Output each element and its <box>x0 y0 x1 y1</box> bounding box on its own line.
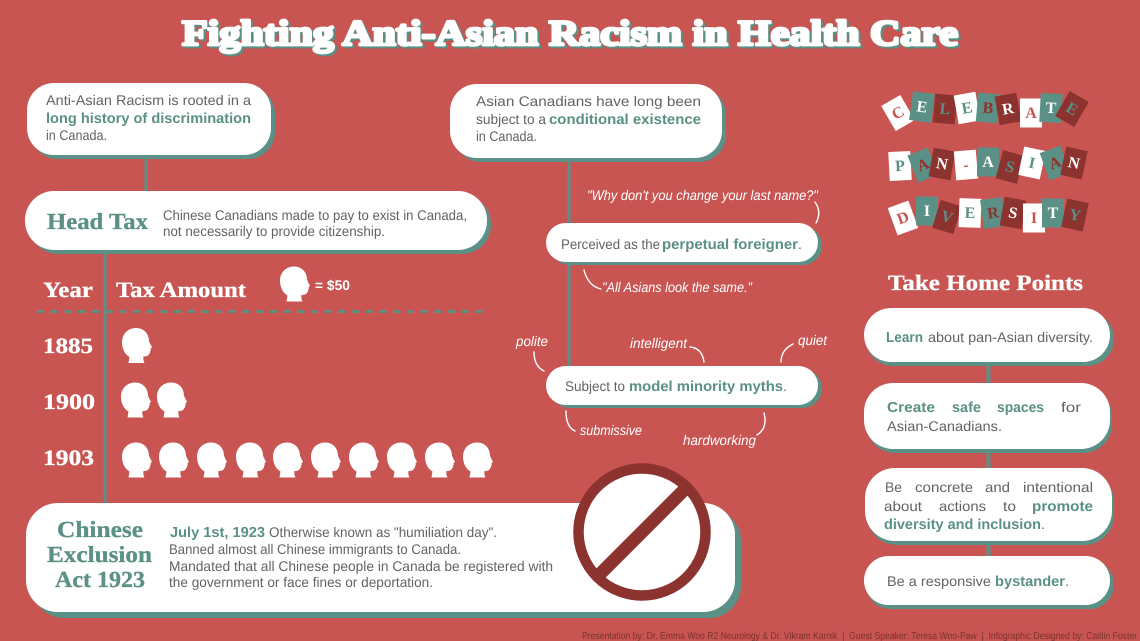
panel: Chinese Exclusion Act 1923: Mandated that all Chinese people in Canada be registered with <box>169 558 553 574</box>
point: create safe spaces: safe <box>952 400 981 416</box>
point: promote diversity and inclusion: about <box>884 498 922 514</box>
chart: head tax amounts by year <box>37 266 493 478</box>
callout: conditional existence: Asian Canadians have long been <box>476 93 701 109</box>
row: 1885 <box>43 328 152 363</box>
banner: pan-asian: A <box>982 154 994 171</box>
panel: Chinese Exclusion Act 1923: the government or face fines or deportation. <box>169 574 433 590</box>
panel: Chinese Exclusion Act 1923: Banned almost all Chinese immigrants to Canada. <box>169 541 461 557</box>
banner: celebrate: E <box>960 99 974 118</box>
panel: head tax: Chinese Canadians made to pay to exist in Canada, <box>163 207 467 223</box>
banner: diversity: Y <box>1067 206 1083 225</box>
point: create safe spaces: for <box>1061 399 1081 415</box>
point: create safe spaces: Create <box>887 400 935 416</box>
panel: head tax: not necessarily to provide citizenship. <box>163 223 385 239</box>
point: responsive bystander <box>864 556 1114 609</box>
panel: perpetual foreigner: perpetual foreigner <box>662 237 798 253</box>
panel: model minority myths <box>515 332 828 448</box>
point: responsive bystander: Be a responsive <box>887 573 991 589</box>
banner: celebrate: C <box>889 103 908 124</box>
point: promote diversity and inclusion: . <box>1041 516 1045 532</box>
point: responsive bystander: bystander <box>995 574 1065 590</box>
banner: diversity: V <box>939 208 955 227</box>
point: learn: about pan-Asian diversity. <box>928 329 1093 345</box>
callout: history of discrimination: long history of discrimination <box>46 111 251 127</box>
panel: model minority myths: . <box>783 378 787 394</box>
title: Fighting Anti-Asian Racism in Health Care <box>182 13 958 53</box>
callout: conditional existence: subject to a <box>476 111 546 127</box>
banner: pan-asian: P <box>895 158 906 175</box>
callout: conditional existence: in Canada. <box>476 128 537 144</box>
banner: pan-asian: N <box>1066 154 1082 173</box>
panel: model minority myths: submissive <box>580 422 642 438</box>
icon: prohibition sign <box>578 468 706 596</box>
row: 1900 <box>43 382 187 418</box>
panel: model minority myths: quiet <box>798 332 828 348</box>
heading: take home points: Take Home Points <box>888 270 1083 295</box>
point: promote diversity and inclusion: promote <box>1032 499 1093 515</box>
panel: perpetual foreigner: Perceived as the <box>561 236 660 252</box>
banner: celebrate: R <box>1001 100 1016 119</box>
banner: pan-asian: A <box>915 155 932 176</box>
banner: celebrate: E <box>915 98 928 117</box>
banner: diversity: T <box>1048 205 1059 222</box>
panel: Chinese Exclusion Act 1923: July 1st, 1923 <box>170 525 265 541</box>
callout: conditional existence: conditional existence <box>549 112 701 128</box>
panel: Chinese Exclusion Act 1923: Exclusion <box>47 542 152 567</box>
point: learn: Learn <box>886 330 923 346</box>
panel: model minority myths: hardworking <box>683 432 756 448</box>
point: create safe spaces: spaces <box>997 400 1044 416</box>
banner: diversity: I <box>924 203 930 220</box>
panel: perpetual foreigner <box>546 187 822 295</box>
point: responsive bystander: . <box>1065 573 1069 589</box>
point: promote diversity and inclusion: concrete <box>915 479 973 495</box>
column headings: Tax Amount <box>116 277 247 302</box>
panel: model minority myths: model minority myths <box>629 379 783 395</box>
panel: perpetual foreigner: "All Asians look the same." <box>602 279 753 295</box>
point: promote diversity and inclusion: and <box>985 479 1010 495</box>
point: create safe spaces <box>864 383 1112 453</box>
point: promote diversity and inclusion: actions <box>939 498 986 514</box>
row: 1885: 1885 <box>43 333 93 358</box>
callout: conditional existence <box>450 84 726 162</box>
banner: celebrate: E <box>1063 99 1081 119</box>
banner: diversity: S <box>1007 204 1019 223</box>
panel: model minority myths: polite <box>515 333 548 349</box>
legend: one head equals $50 <box>280 266 350 302</box>
banner: celebrate: B <box>982 100 994 117</box>
point: promote diversity and inclusion: to <box>1003 498 1016 514</box>
banner: celebrate: L <box>939 101 951 118</box>
callout: history of discrimination: Anti-Asian Racism is rooted in a <box>46 92 251 108</box>
column headings: Year <box>43 277 93 302</box>
banner: celebrate <box>881 91 1089 131</box>
panel: model minority myths: intelligent <box>630 335 688 351</box>
row: 1903 <box>43 442 493 478</box>
panel: Chinese Exclusion Act 1923: Act 1923 <box>55 567 145 592</box>
banner: celebrate: T <box>1045 100 1057 117</box>
banner: pan-asian <box>888 146 1088 184</box>
banner: diversity: D <box>895 209 912 228</box>
callout: history of discrimination: in Canada. <box>46 127 107 143</box>
banner: pan-asian: A <box>1047 153 1064 173</box>
banner: pan-asian: I <box>1027 155 1037 172</box>
banner: celebrate: A <box>1025 105 1037 122</box>
panel: perpetual foreigner: "Why don't you change your last name?" <box>587 187 819 203</box>
row: 1903: 1903 <box>43 445 94 470</box>
panel: Chinese Exclusion Act 1923 <box>26 503 741 618</box>
banner: pan-asian: S <box>1003 158 1016 177</box>
point: create safe spaces: Asian-Canadians. <box>887 418 1002 434</box>
panel: Chinese Exclusion Act 1923: Otherwise known as "humiliation day". <box>269 524 497 540</box>
point: promote diversity and inclusion: diversity and inclusion <box>884 517 1041 533</box>
banner: diversity <box>888 196 1089 235</box>
panel: head tax: Head Tax <box>47 209 149 234</box>
banner: diversity: R <box>986 204 1000 223</box>
panel: perpetual foreigner: . <box>798 236 802 252</box>
point: promote diversity and inclusion: Be <box>885 479 902 495</box>
banner: pan-asian: N <box>935 155 950 174</box>
connector lines: left and centre timelines <box>104 150 990 560</box>
row: 1900: 1900 <box>43 389 95 414</box>
point: promote diversity and inclusion: intentional <box>1023 479 1093 495</box>
legend: one head equals $50: = $50 <box>315 277 350 293</box>
banner: pan-asian: - <box>963 157 969 174</box>
panel: model minority myths: Subject to <box>565 378 625 394</box>
point: promote diversity and inclusion <box>865 468 1114 545</box>
panel: Chinese Exclusion Act 1923: Chinese <box>57 517 143 542</box>
column headings <box>43 277 247 302</box>
point: learn <box>864 308 1114 366</box>
banner: diversity: E <box>964 205 976 222</box>
banner: diversity: I <box>1031 210 1037 227</box>
panel: head tax <box>25 191 491 254</box>
callout: history of discrimination <box>27 83 275 159</box>
